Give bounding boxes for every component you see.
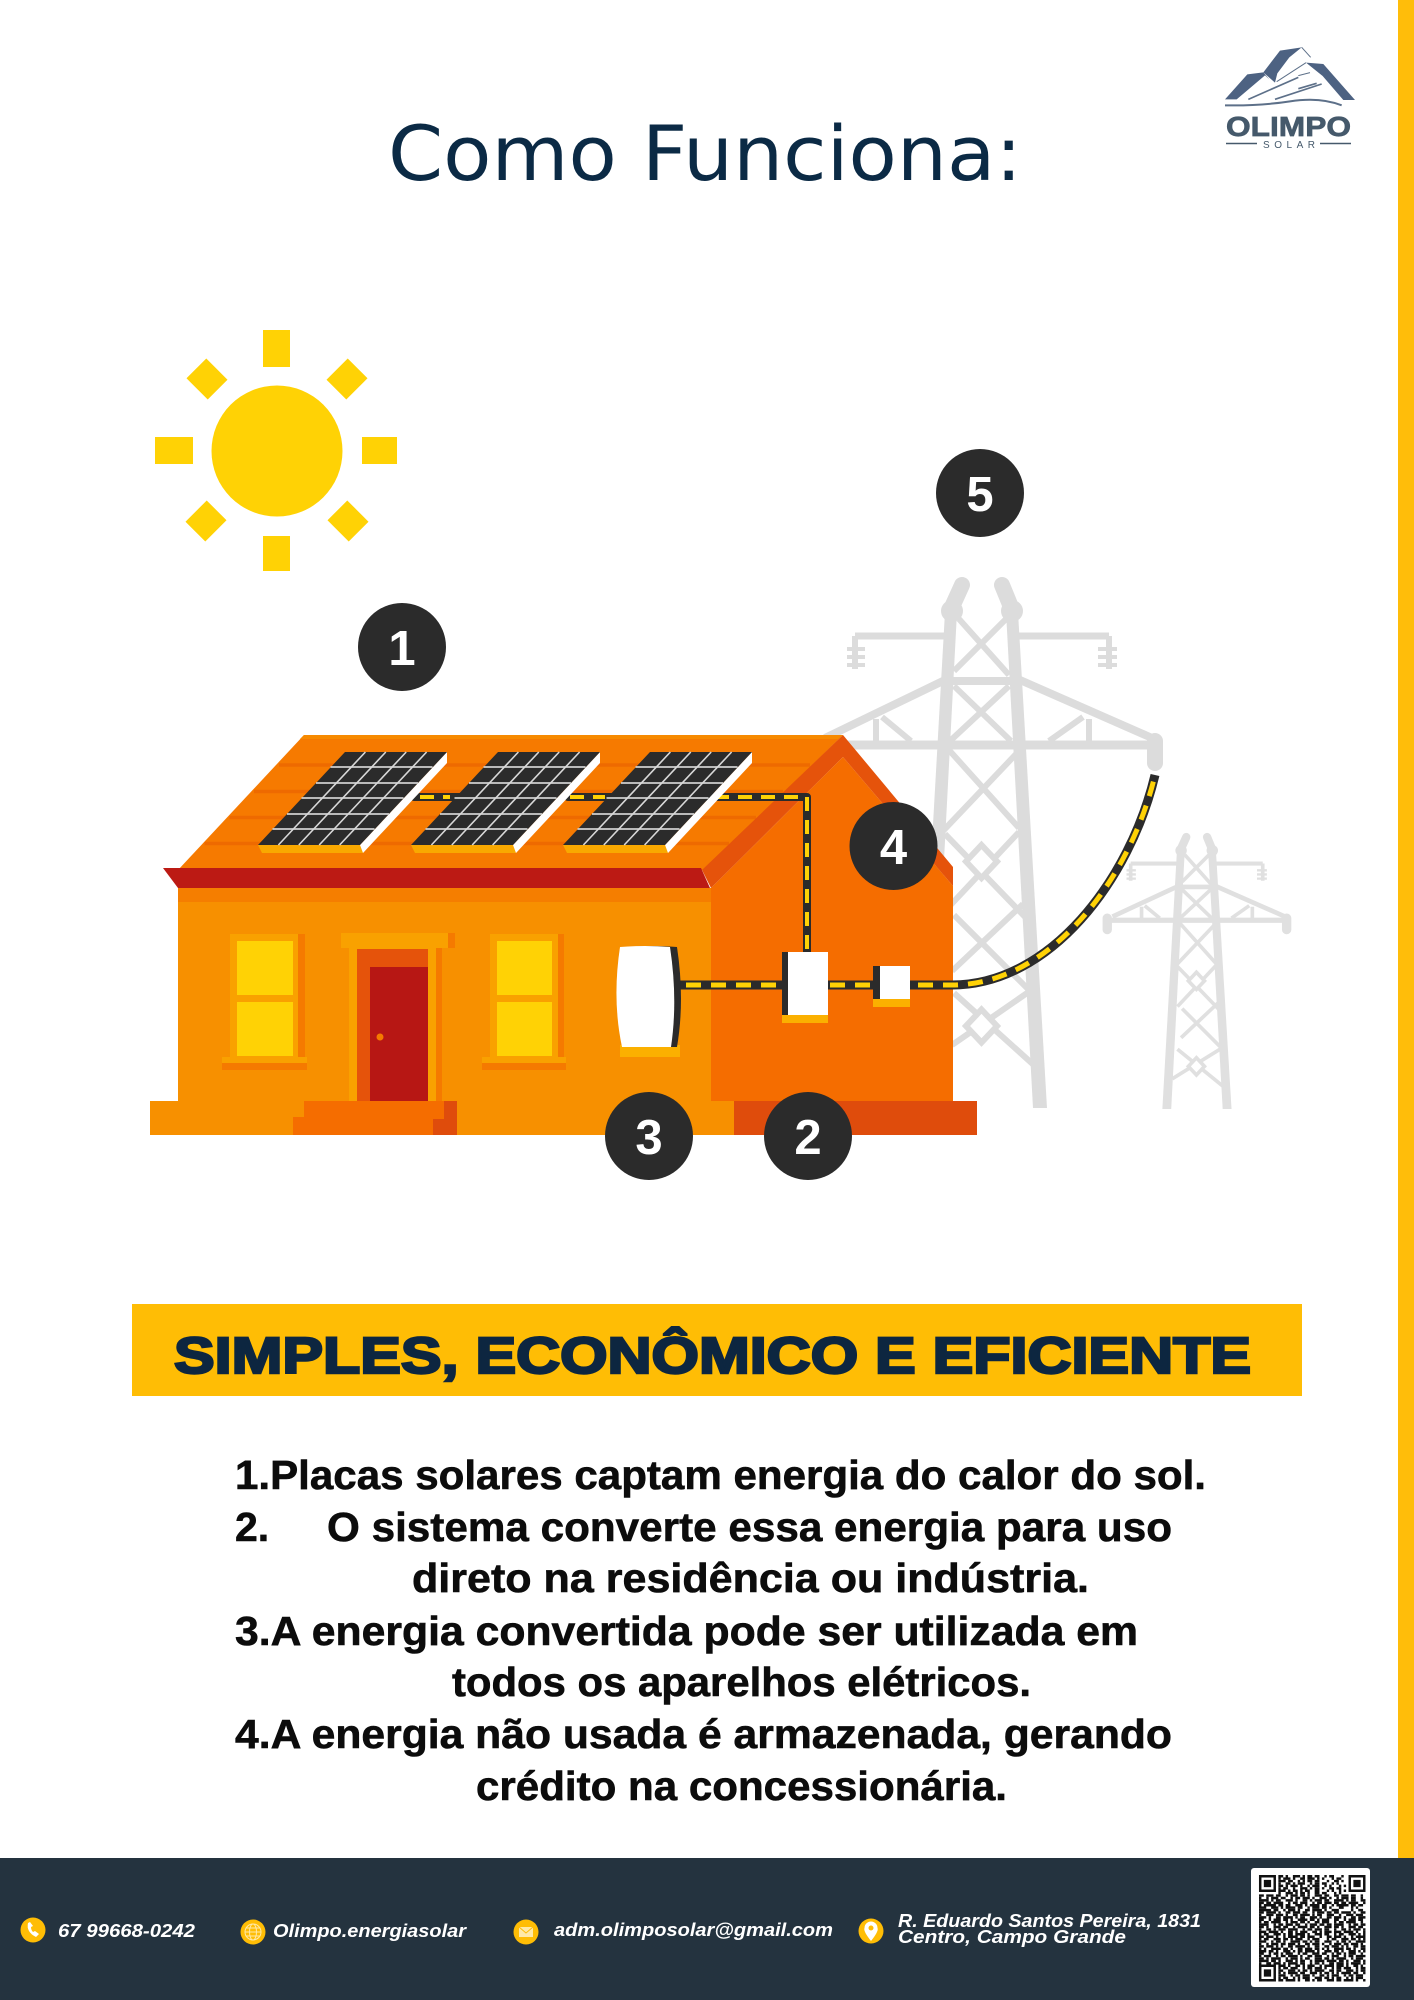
numbered explanation text: todos os aparelhos elétricos. bbox=[452, 1659, 1031, 1705]
number badge 2: 2 bbox=[794, 1111, 822, 1165]
house side wall bbox=[711, 757, 953, 1101]
solar panel 2 bbox=[411, 752, 600, 853]
left window bbox=[222, 934, 307, 1070]
icon: sun bbox=[155, 330, 397, 571]
number badge 5: 5 bbox=[966, 468, 994, 522]
door steps bbox=[293, 1101, 457, 1135]
icon: phone bbox=[20, 1918, 46, 1942]
numbered explanation text: direto na residência ou indústria. bbox=[412, 1555, 1089, 1601]
logo wordmark: OLIMPO bbox=[1226, 111, 1351, 142]
address: R. Eduardo Santos Pereira, 1831 bbox=[898, 1911, 1201, 1931]
numbered explanation text: 3.A energia convertida pode ser utilizada em bbox=[235, 1608, 1138, 1654]
wiring to grid bbox=[680, 775, 1155, 985]
QR code bbox=[1251, 1868, 1370, 1987]
number badge 1: 1 bbox=[388, 622, 416, 676]
front wall bbox=[178, 888, 711, 1101]
icon: mountains bbox=[1225, 47, 1355, 105]
number badge 5 bbox=[936, 449, 1024, 537]
number badge 4: 4 bbox=[880, 821, 907, 875]
small transmission tower bbox=[1107, 837, 1287, 1109]
numbered explanation text: crédito na concessionária. bbox=[476, 1763, 1007, 1809]
numbered explanation text: 4.A energia não usada é armazenada, gerando bbox=[235, 1711, 1172, 1757]
website: Olimpo.energiasolar bbox=[273, 1921, 467, 1941]
address: Centro, Campo Grande bbox=[898, 1927, 1126, 1947]
battery bbox=[616, 946, 681, 1057]
number badge 1 bbox=[358, 603, 446, 691]
numbered explanation text: 1.Placas solares captam energia do calor do sol. bbox=[235, 1452, 1206, 1498]
meter bbox=[873, 966, 910, 1007]
numbered explanation text: 2. bbox=[235, 1504, 269, 1550]
wiring from panels bbox=[414, 797, 807, 952]
phone number: 67 99668-0242 bbox=[58, 1921, 195, 1941]
logo: Olimpo Solar bbox=[1225, 47, 1355, 151]
number badge 3: 3 bbox=[635, 1111, 663, 1165]
number badge 2 bbox=[764, 1092, 852, 1180]
door bbox=[341, 933, 455, 1101]
number badge 3 bbox=[605, 1092, 693, 1180]
base bbox=[150, 1101, 734, 1135]
number badge 4 bbox=[850, 802, 938, 890]
address bbox=[898, 1911, 1201, 1947]
solar panel 1 bbox=[258, 752, 447, 853]
numbered explanation text bbox=[235, 1452, 1206, 1809]
inverter bbox=[782, 952, 828, 1023]
banner heading: SIMPLES, ECONÔMICO E EFICIENTE bbox=[174, 1326, 1251, 1384]
icon: mail bbox=[514, 1920, 538, 1944]
house bbox=[150, 735, 1155, 1135]
gable trim bbox=[702, 735, 953, 888]
yellow side bar bbox=[1398, 0, 1414, 1858]
email: adm.olimposolar@gmail.com bbox=[554, 1920, 833, 1940]
numbered explanation text: O sistema converte essa energia para uso bbox=[327, 1504, 1172, 1550]
right window bbox=[482, 934, 566, 1070]
large transmission tower bbox=[825, 585, 1155, 1108]
title: Como Funciona: bbox=[388, 109, 1022, 198]
roof eave bbox=[163, 868, 710, 888]
solar panel 3 bbox=[563, 752, 752, 853]
icon: location pin bbox=[858, 1918, 884, 1944]
logo subtitle: SOLAR bbox=[1263, 140, 1315, 151]
house roof bbox=[178, 735, 843, 870]
footer bbox=[0, 1858, 1414, 2000]
banner bbox=[132, 1304, 1302, 1396]
icon: globe bbox=[240, 1920, 266, 1944]
